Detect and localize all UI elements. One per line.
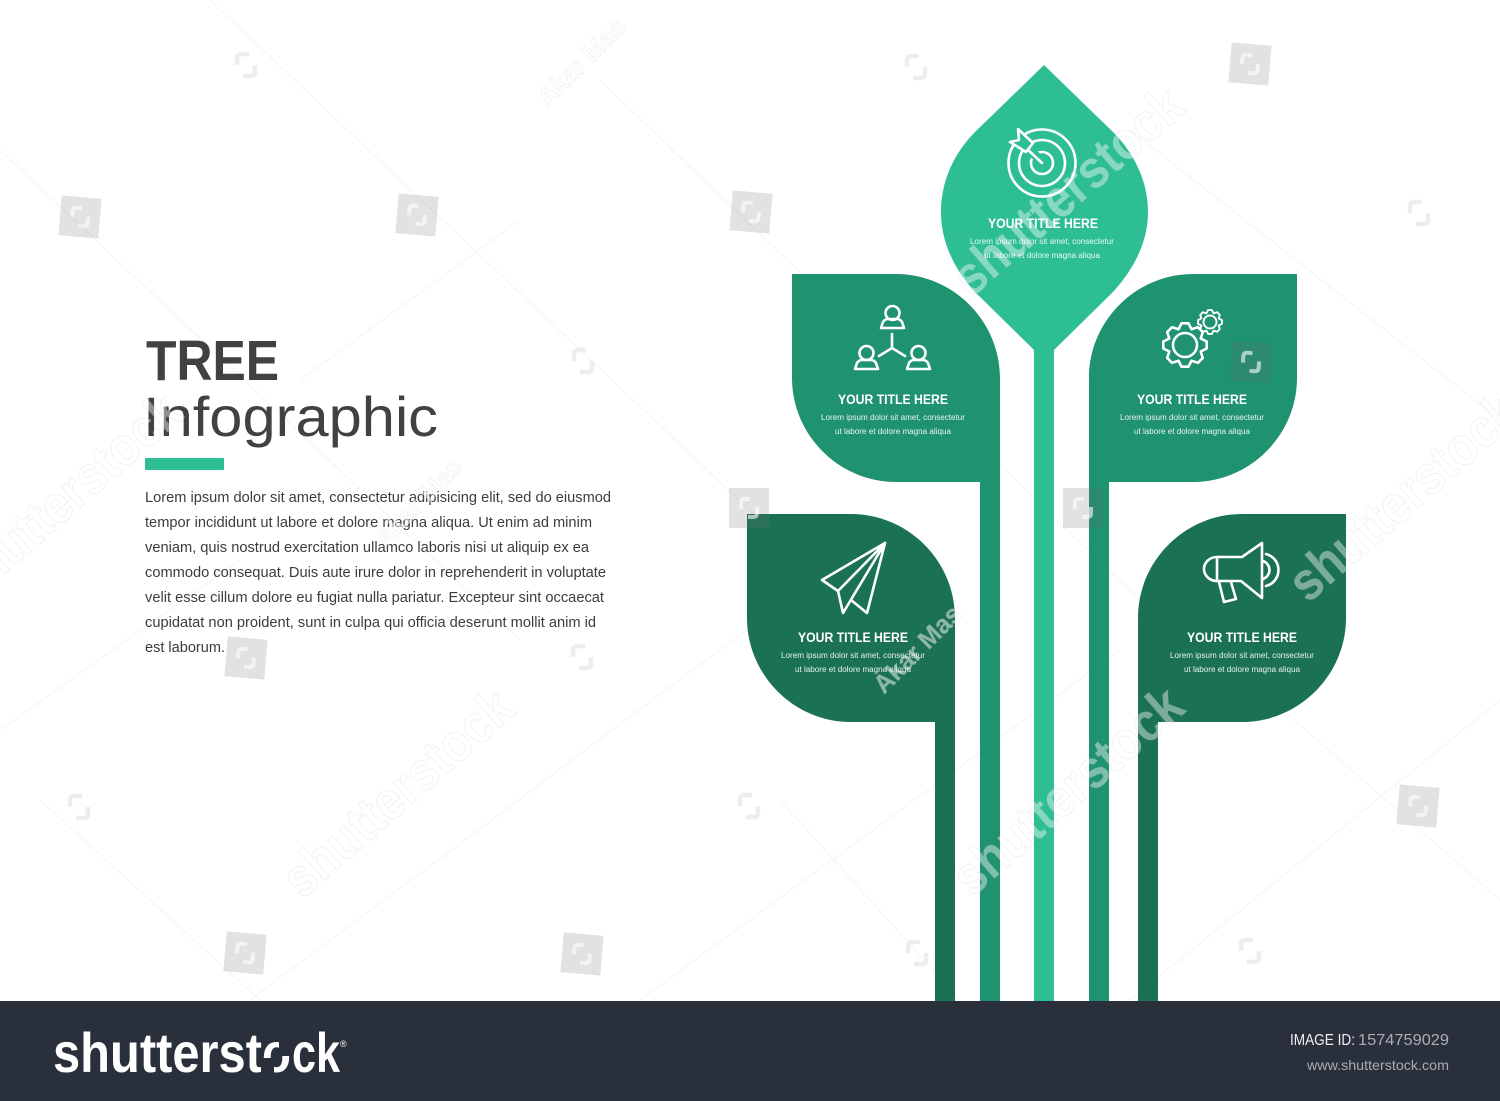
footer logo: shutterstock: ® (340, 1039, 347, 1049)
heading: TREE Infographic (143, 329, 438, 448)
footer logo: shutterstock: ck (292, 1021, 341, 1084)
accent bar (145, 458, 224, 470)
icon: gears (1163, 310, 1222, 367)
icon: paper plane (822, 543, 885, 613)
watermark overlay: Akar Mas (531, 12, 631, 112)
text: top leaf: ut labore et dolore magna aliqua (984, 251, 1101, 260)
footer: image id: IMAGE ID: (1290, 1032, 1355, 1049)
text block: description: Lorem ipsum dolor sit amet, consectetur adipisicing elit, sed do eiusmod (145, 490, 611, 506)
text block: description (145, 490, 611, 656)
text: top leaf (970, 216, 1114, 260)
tree leaf: lower right announce (1138, 514, 1346, 1001)
footer: image id (1290, 1032, 1449, 1049)
text block: description: veniam, quis nostrud exercitation ullamco laboris nisi ut aliquip ex ea (145, 540, 589, 556)
tree leaf: upper left team (792, 274, 1000, 1001)
watermark overlay: Akar Mas (867, 599, 967, 699)
footer: image id: 1574759029 (1358, 1032, 1449, 1049)
text: lower right leaf: ut labore et dolore magna aliqua (1184, 665, 1301, 674)
icon: people network (855, 306, 930, 369)
footer logo: shutterstock: shutterst (53, 1021, 262, 1084)
watermark overlay: shutterstock (941, 674, 1196, 907)
heading: TREE Infographic: Infographic (143, 385, 438, 448)
icon: target with arrow (1008, 129, 1076, 196)
heading: TREE Infographic: TREE (146, 329, 279, 393)
watermark overlay: Akar Mas (368, 452, 468, 552)
text: lower right leaf: YOUR TITLE HERE (1187, 630, 1297, 645)
watermark overlay: shutterstock (941, 74, 1196, 307)
text: upper right leaf: ut labore et dolore magna aliqua (1134, 427, 1251, 436)
text: upper left leaf (821, 392, 965, 436)
text: upper right leaf: YOUR TITLE HERE (1137, 392, 1247, 407)
text: upper left leaf: YOUR TITLE HERE (838, 392, 948, 407)
text: lower right leaf: Lorem ipsum dolor sit amet, consectetur (1170, 651, 1314, 660)
text: lower right leaf (1170, 630, 1314, 674)
text: upper left leaf: Lorem ipsum dolor sit amet, consectetur (821, 413, 965, 422)
icon: megaphone (1204, 543, 1278, 602)
text: top leaf: YOUR TITLE HERE (988, 216, 1098, 231)
text block: description: tempor incididunt ut labore et dolore magna aliqua. Ut enim ad minim (145, 515, 592, 531)
text: top leaf: Lorem ipsum dolor sit amet, consectetur (970, 237, 1114, 246)
footer logo: shutterstock: o (262, 1021, 291, 1084)
text: lower left leaf: ut labore et dolore magna aliqua (795, 665, 912, 674)
footer bar (0, 1001, 1500, 1101)
text block: description: velit esse cillum dolore eu fugiat nulla pariatur. Excepteur sint occaecat (145, 590, 604, 606)
watermark overlay: shutterstock (271, 676, 526, 909)
tree leaf: top goal (941, 65, 1148, 1001)
text: upper right leaf: Lorem ipsum dolor sit amet, consectetur (1120, 413, 1264, 422)
tree leaf: upper right settings (1089, 274, 1297, 1001)
text: lower left leaf: YOUR TITLE HERE (798, 630, 908, 645)
text: upper right leaf (1120, 392, 1264, 436)
text block: description: est laborum. (145, 640, 225, 656)
text: upper left leaf: ut labore et dolore magna aliqua (835, 427, 952, 436)
text block: description: cupidatat non proident, sunt in culpa qui officia deserunt mollit anim id (145, 615, 596, 631)
text: lower left leaf (781, 630, 925, 674)
text: lower left leaf: Lorem ipsum dolor sit amet, consectetur (781, 651, 925, 660)
text block: description: commodo consequat. Duis aute irure dolor in reprehenderit in voluptate (145, 565, 606, 581)
tree leaf: lower left send (747, 514, 955, 1001)
footer: website: www.shutterstock.com (1306, 1057, 1449, 1073)
